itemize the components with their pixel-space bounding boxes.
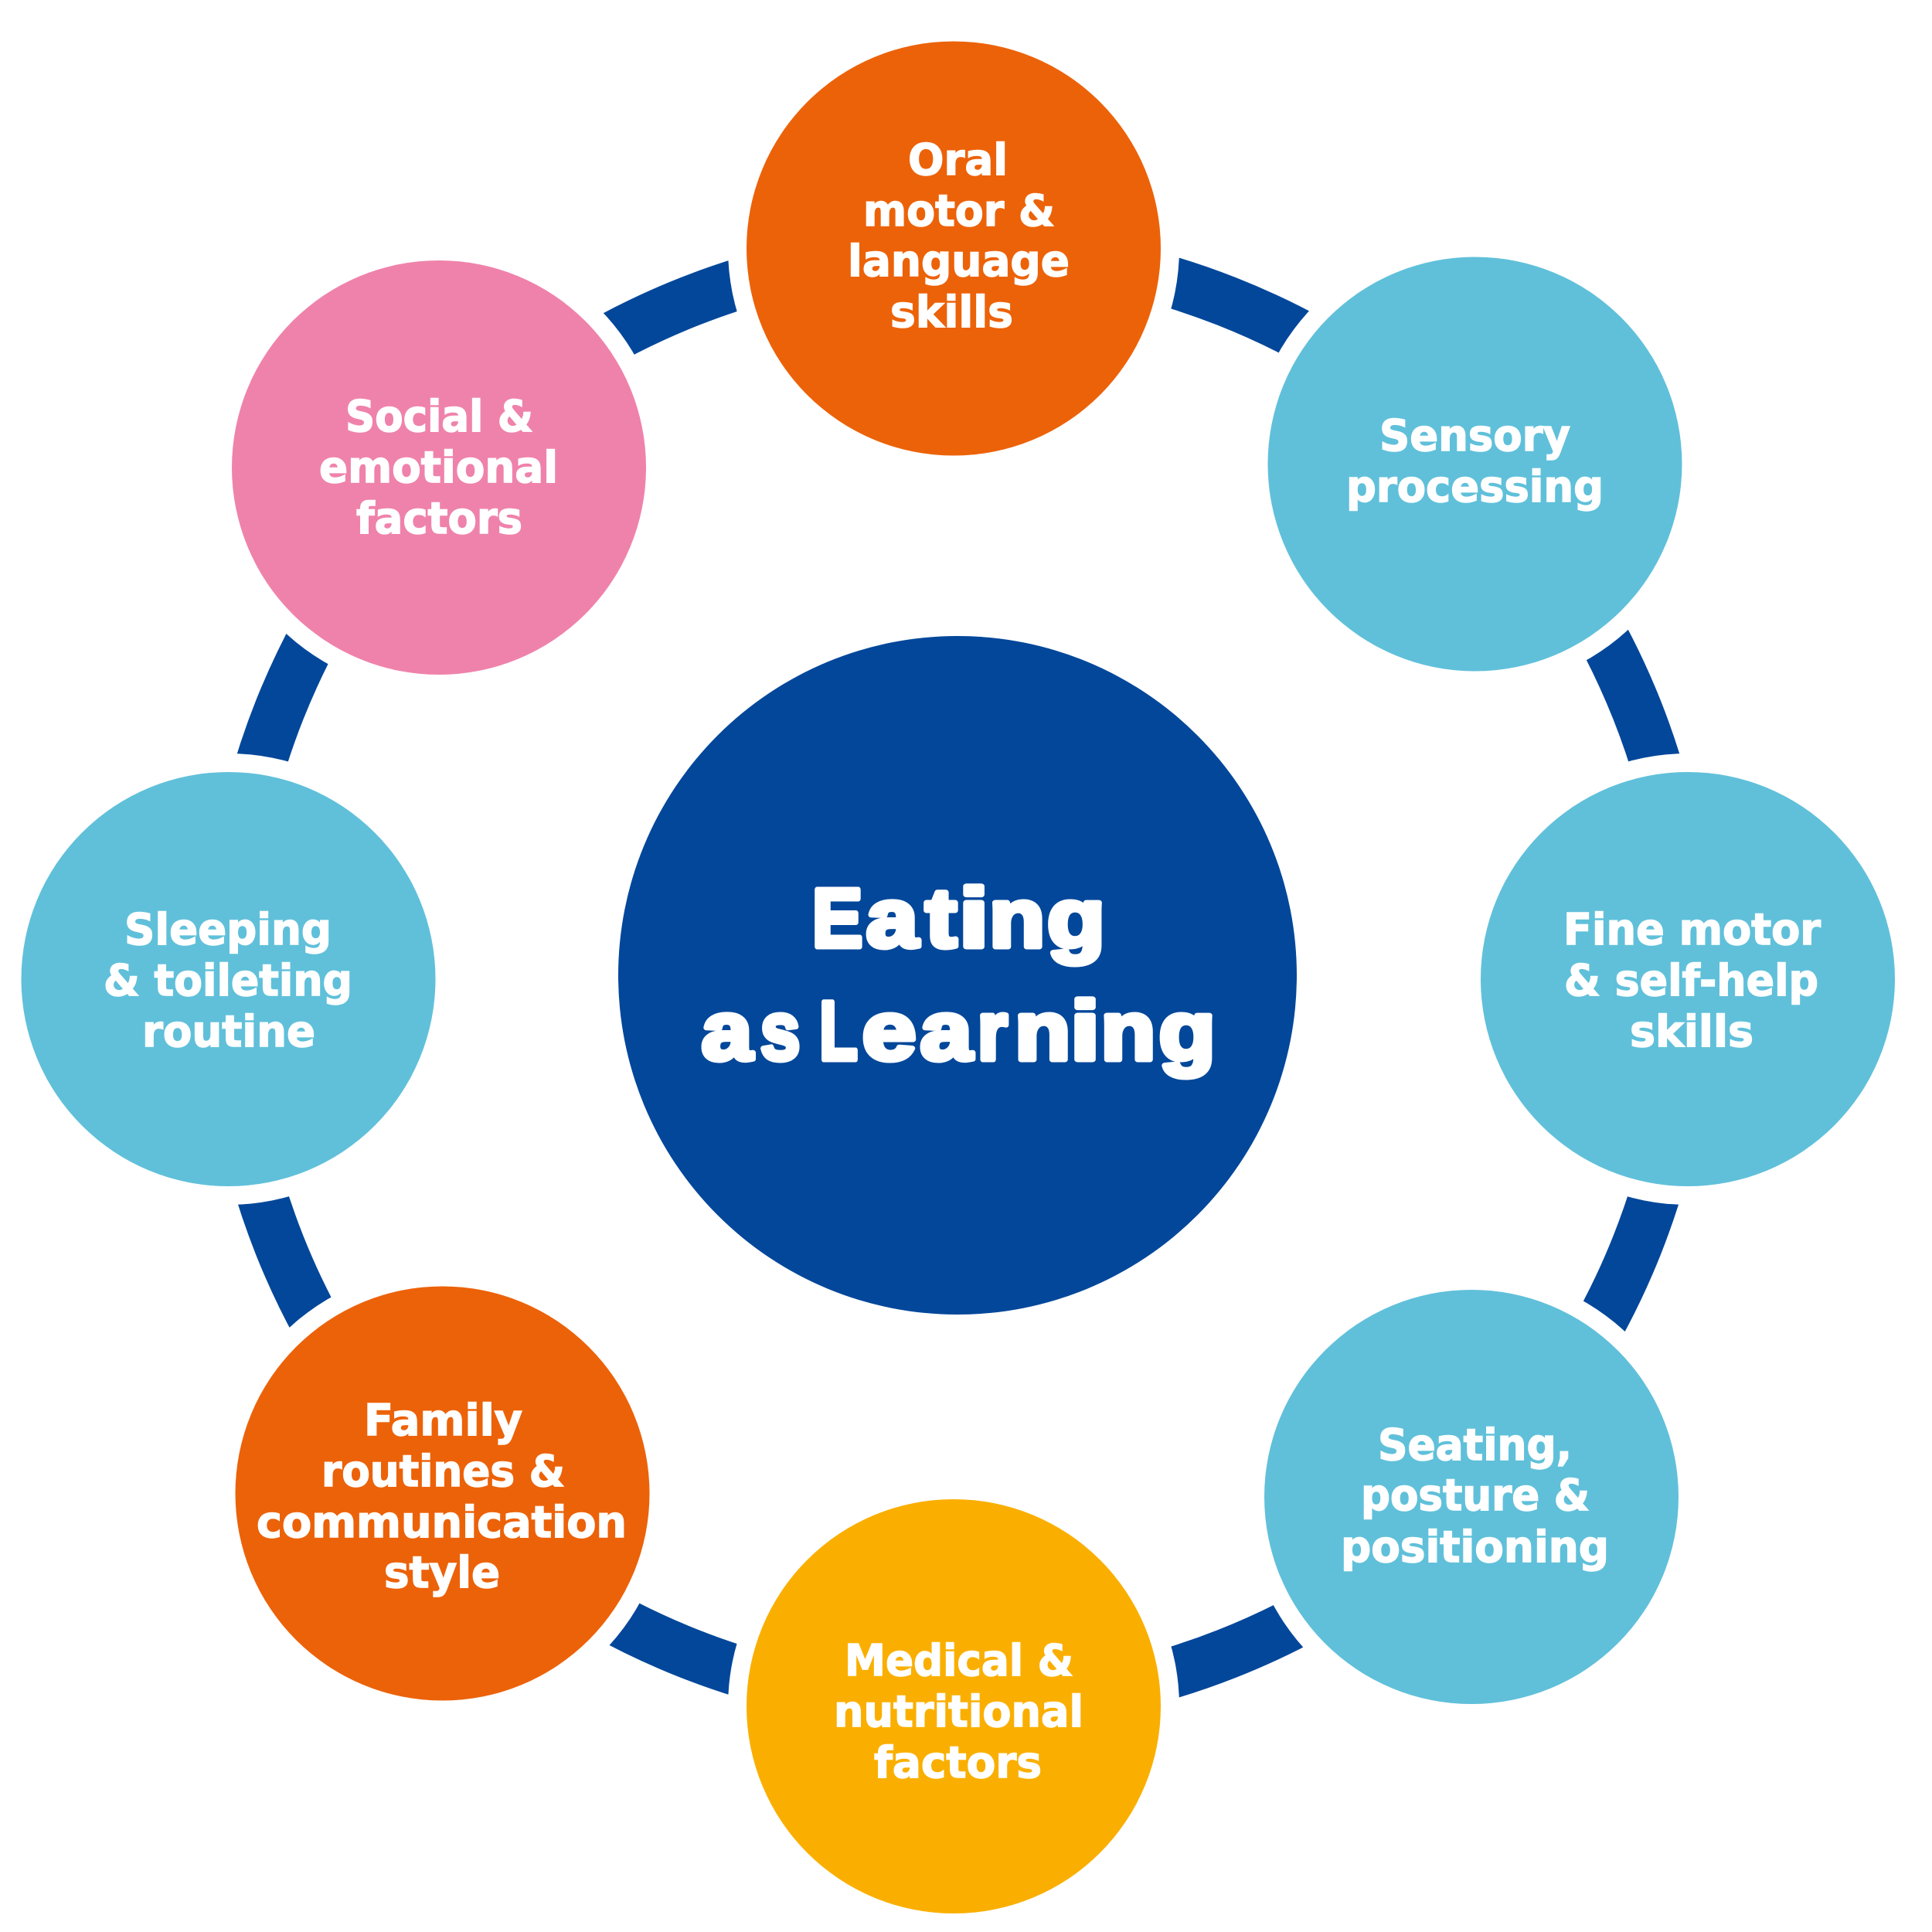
node: Fine motor & self-help skills: & self-help	[1564, 956, 1818, 1006]
node: Oral motor & language skills: motor &	[863, 186, 1055, 236]
node: Fine motor & self-help skills: Fine motor	[1563, 905, 1821, 955]
node: Social & emotional factors: Social &	[345, 392, 533, 442]
node: Medical & nutritional factors: Medical &	[845, 1636, 1073, 1686]
node: Sleeping & toileting routine: & toileting	[104, 956, 352, 1006]
node: Family routines & communication style: Family	[364, 1396, 522, 1446]
title line 2: as Learning: i	[1070, 984, 1100, 1077]
node: Sensory processing: processing	[1346, 462, 1604, 512]
node: Family routines & communication style: routines &	[321, 1447, 565, 1497]
connector ring linking the eight factors	[229, 250, 1688, 1705]
title line 2: as Learning: g	[1159, 984, 1216, 1077]
node: Oral motor & language skills: skills	[890, 287, 1013, 338]
node: Medical & nutritional factors: nutritional	[834, 1687, 1083, 1737]
node: Oral motor & language skills: Oral	[908, 135, 1008, 185]
title line 2: as Learning: s	[760, 984, 800, 1077]
node: Sensory processing	[1249, 238, 1700, 689]
node: Sensory processing: Sensory	[1379, 411, 1570, 461]
node: Family routines & communication style	[216, 1267, 668, 1719]
title line 2: as Learning: n	[1100, 984, 1155, 1077]
node: Sleeping & toileting routine: Sleeping	[124, 905, 332, 955]
node: Social & emotional factors: factors	[356, 494, 522, 544]
node: Family routines & communication style: communication	[257, 1498, 627, 1548]
title line 2: as Learning: r	[978, 984, 1008, 1077]
title line 2: as Learning: n	[1015, 984, 1070, 1077]
node: Oral motor & language skills	[728, 23, 1179, 474]
title line 1: Eating: a	[866, 871, 919, 964]
node: Oral motor & language skills: language	[848, 236, 1070, 287]
title line 1: Eating: t	[926, 871, 957, 964]
central hub: Eating as Learning	[618, 636, 1297, 1315]
node: Seating, posture & positioning: Seating,	[1378, 1420, 1572, 1471]
node: Sleeping & toileting routine: routine	[142, 1007, 315, 1057]
node: Seating, posture & positioning	[1246, 1271, 1697, 1723]
title line 1: Eating: E	[812, 871, 862, 964]
title line 1: Eating: g	[1047, 871, 1105, 964]
node: Fine motor & self-help skills: skills	[1630, 1007, 1753, 1057]
node: Social & emotional factors: emotional	[319, 443, 558, 493]
node: Sleeping & toileting routine	[3, 753, 454, 1205]
title line 2: as Learning: a	[702, 984, 753, 1077]
title line 2: as Learning	[702, 984, 1216, 1077]
node: Seating, posture & positioning: posture &	[1361, 1471, 1590, 1521]
node: Family routines & communication style: style	[384, 1548, 500, 1598]
node: Medical & nutritional factors	[728, 1481, 1179, 1932]
title line 1: Eating: i	[959, 871, 988, 964]
title line 2: as Learning: a	[920, 984, 973, 1077]
title line 1: Eating	[812, 871, 1105, 964]
node: Seating, posture & positioning: positioning	[1341, 1522, 1609, 1573]
title line 2: as Learning: L	[819, 984, 858, 1077]
node: Medical & nutritional factors: factors	[874, 1738, 1042, 1788]
node: Fine motor & self-help skills	[1462, 753, 1913, 1205]
title line 1: Eating: n	[989, 871, 1045, 964]
title line 2: as Learning: e	[862, 984, 917, 1077]
node: Social & emotional factors	[213, 242, 665, 693]
